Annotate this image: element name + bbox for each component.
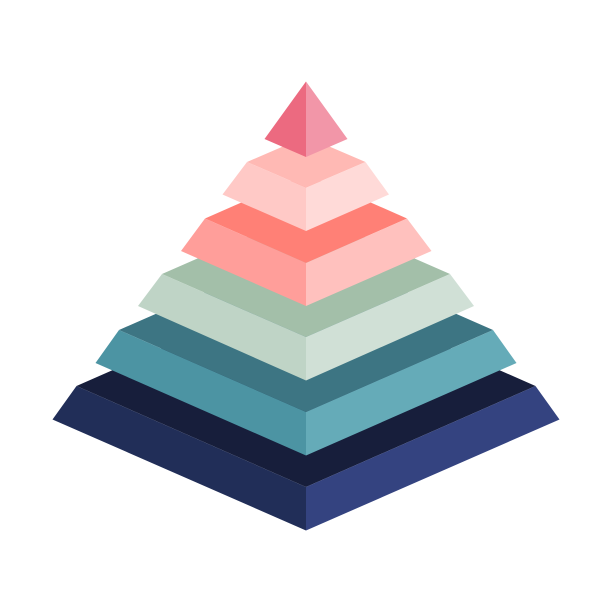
- tier 4: sage green: [138, 211, 474, 380]
- tier 2: light pink: [222, 136, 389, 231]
- tier 6: navy base: [52, 285, 560, 530]
- tier 5: teal: [96, 248, 516, 456]
- tier 1: apex: [264, 82, 348, 157]
- tier 3: coral: [181, 174, 432, 306]
